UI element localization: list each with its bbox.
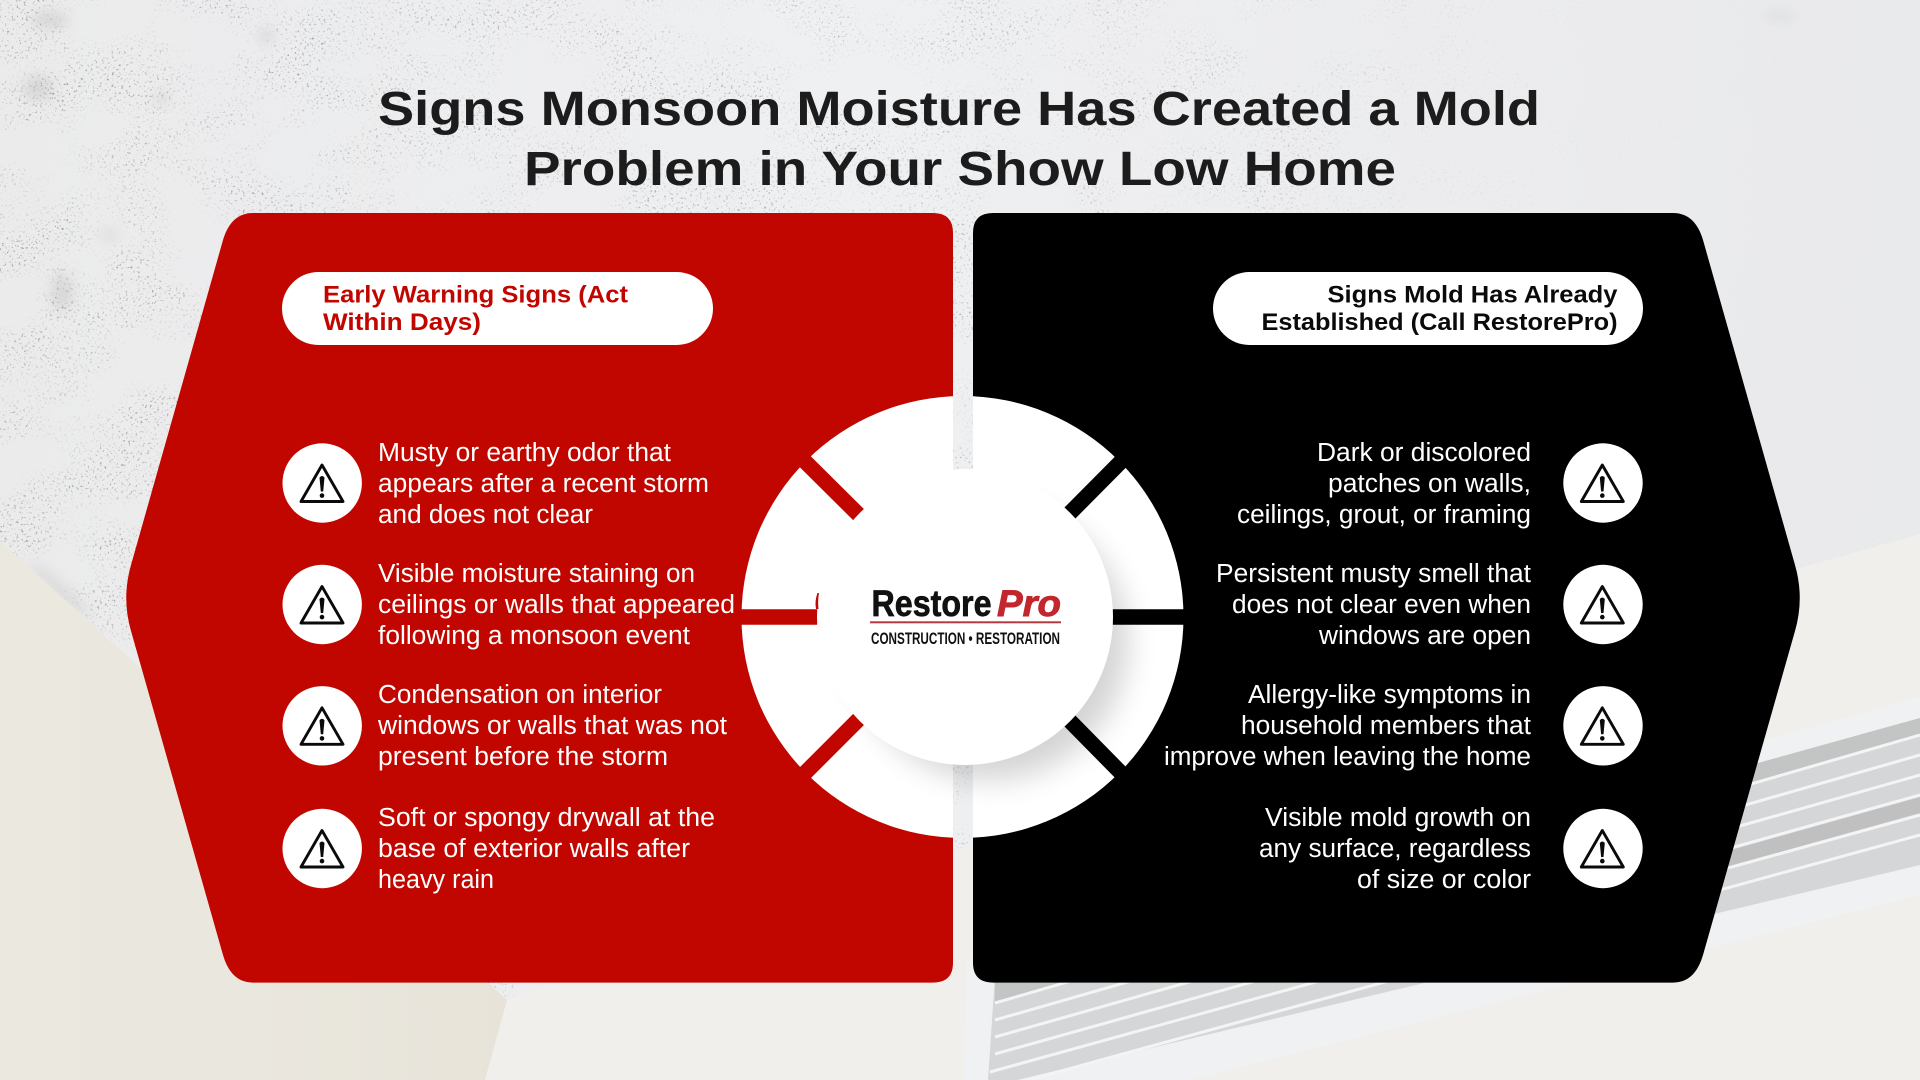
small red arc fragment (816, 593, 819, 609)
left wall (0, 500, 507, 1080)
panel background black (973, 213, 1800, 983)
item: dark patches: ceilings, grout, or framing (1237, 501, 1531, 529)
divider bars (738, 456, 1188, 778)
item: persistent musty smell: does not clear even when (1232, 591, 1531, 619)
title: Problem in Your Show Low Home (524, 143, 1396, 196)
air vent (963, 697, 1920, 1080)
item: moisture staining: following a monsoon event (378, 622, 690, 650)
item: spongy drywall: heavy rain (378, 866, 494, 894)
item: condensation: windows or walls that was not (377, 712, 727, 740)
item: visible mold growth: any surface, regardless (1259, 835, 1531, 863)
item: condensation (282, 681, 727, 771)
item: allergy symptoms (1164, 681, 1643, 771)
item: persistent musty smell (1216, 560, 1643, 650)
item: allergy symptoms: improve when leaving the home (1164, 743, 1531, 771)
item: musty odor: appears after a recent storm (378, 470, 709, 498)
item: allergy symptoms: household members that (1241, 712, 1531, 740)
item: visible mold growth: of size or color (1357, 866, 1532, 894)
center wheel with logo (738, 396, 1188, 838)
item: visible mold growth: Visible mold growth on (1265, 804, 1531, 832)
item: musty odor: and does not clear (378, 501, 594, 529)
pill heading: call RestorePro: Signs Mold Has Already (1328, 282, 1618, 308)
item: spongy drywall: Soft or spongy drywall at the (378, 804, 715, 832)
logo: RestorePro: Pro (997, 583, 1061, 624)
panel background red (126, 213, 953, 983)
inner white circle (817, 469, 1113, 765)
item: musty odor (282, 439, 709, 529)
item: condensation: Condensation on interior (378, 681, 663, 709)
logo: RestorePro (870, 583, 1061, 648)
pill heading: call RestorePro: Established (Call RestorePro) (1262, 309, 1618, 336)
title: Signs Monsoon Moisture Has Created a Mold (378, 83, 1540, 136)
item: moisture staining: ceilings or walls that appeared (378, 591, 735, 619)
item: moisture staining: Visible moisture staining on (378, 560, 695, 588)
title (378, 83, 1540, 196)
pill heading: early warning: Early Warning Signs (Act (323, 282, 628, 308)
item: dark patches: patches on walls, (1328, 470, 1531, 498)
item: musty odor: Musty or earthy odor that (378, 439, 671, 467)
item: persistent musty smell: windows are open (1318, 622, 1531, 650)
pill heading: early warning: Within Days) (323, 309, 481, 336)
logo: RestorePro: Restore (872, 583, 992, 624)
pill heading: call RestorePro (1213, 272, 1643, 345)
item: dark patches (1237, 439, 1643, 529)
panel: mold already established (973, 213, 1800, 983)
panel: early warning signs (126, 213, 953, 983)
item: moisture staining (282, 560, 735, 650)
outer white ring segments (742, 396, 1184, 838)
item: condensation: present before the storm (378, 743, 668, 771)
inner circle shadow (852, 504, 1128, 780)
item: spongy drywall: base of exterior walls after (378, 835, 691, 863)
item: persistent musty smell: Persistent musty smell that (1216, 560, 1531, 588)
item: dark patches: Dark or discolored (1317, 439, 1531, 467)
item: visible mold growth (1259, 804, 1643, 894)
pill heading: early warning (282, 272, 713, 345)
item: allergy symptoms: Allergy-like symptoms in (1248, 681, 1531, 709)
logo: RestorePro: CONSTRUCTION • RESTORATION (871, 630, 1060, 648)
item: spongy drywall (282, 804, 715, 894)
